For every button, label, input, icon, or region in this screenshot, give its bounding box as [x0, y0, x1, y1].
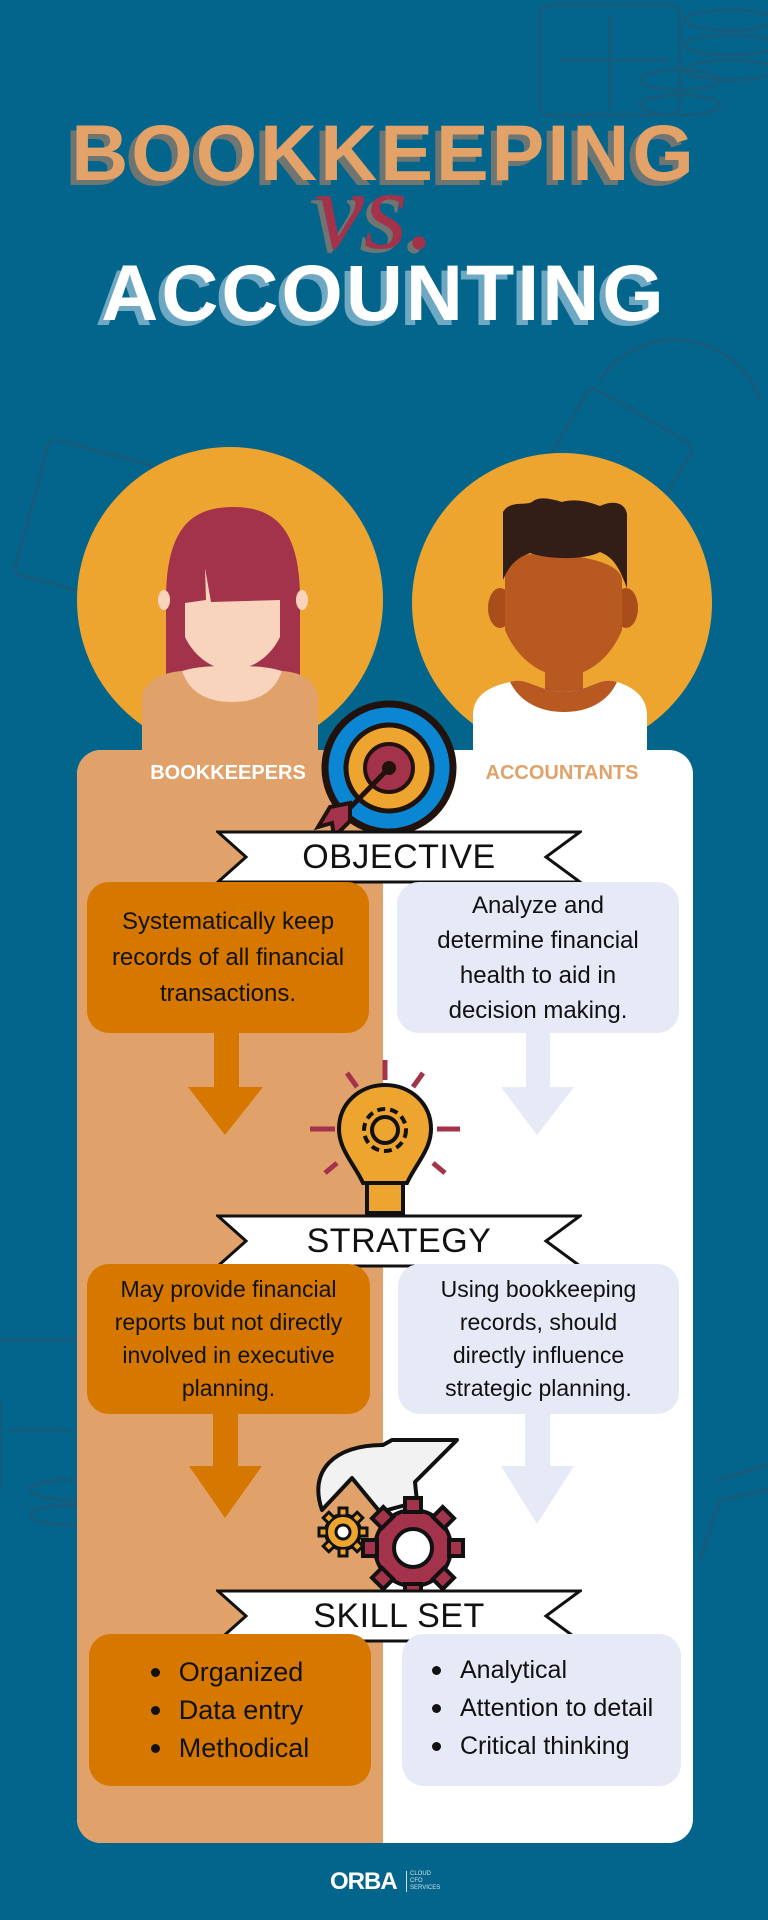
skills: accountants box — [402, 1634, 681, 1786]
title: vs: vs. — [314, 149, 436, 273]
strategy: accountants box — [398, 1264, 679, 1414]
skills: bookkeepers box: Data entry — [179, 1695, 303, 1725]
objective: accountants box: Analyze and — [472, 892, 604, 918]
logo: ORBA — [330, 1868, 440, 1895]
objective: bookkeepers box: Systematically keep — [122, 908, 334, 934]
logo: ORBA: CFO — [410, 1878, 423, 1884]
objective: bookkeepers box: transactions. — [160, 980, 296, 1006]
label: bookkeepers: BOOKKEEPERS — [150, 762, 306, 784]
icon: hammer and gears — [316, 1438, 465, 1590]
objective: bookkeepers box — [87, 882, 369, 1033]
strategy: accountants box: strategic planning. — [445, 1375, 632, 1401]
skills: accountants box: Attention to detail — [460, 1694, 653, 1722]
skills: accountants box: Critical thinking — [460, 1732, 630, 1760]
objective: accountants box: determine financial — [437, 926, 639, 954]
banner: skill set: SKILL SET — [313, 1597, 485, 1635]
arrow: right 1 — [501, 1033, 574, 1135]
arrow: left 1 — [188, 1033, 263, 1135]
title: bookkeeping: BOOKKEEPING — [71, 108, 697, 197]
objective: accountants box: health to aid in — [460, 962, 616, 988]
skills: bookkeepers box: Organized — [179, 1657, 303, 1687]
objective: bookkeepers box: records of all financial — [112, 944, 344, 970]
logo: ORBA: SERVICES — [410, 1885, 440, 1891]
skills: accountants box: Analytical — [460, 1656, 567, 1684]
icon: target — [314, 700, 456, 830]
title: accounting: ACCOUNTING — [101, 248, 667, 337]
logo: ORBA: CLOUD — [410, 1871, 431, 1877]
banner: strategy: STRATEGY — [307, 1222, 491, 1260]
skills: bookkeepers box — [89, 1634, 371, 1786]
banner: objective: OBJECTIVE — [302, 838, 496, 876]
skills: bookkeepers box: Methodical — [179, 1733, 309, 1763]
strategy: bookkeepers box: involved in executive — [122, 1342, 335, 1368]
strategy: bookkeepers box — [87, 1264, 370, 1414]
icon: lightbulb — [310, 1060, 460, 1214]
strategy: bookkeepers box: May provide financial — [120, 1276, 337, 1302]
label: accountants: ACCOUNTANTS — [486, 762, 638, 784]
people illustrations — [77, 447, 712, 750]
arrow: left 2 — [189, 1414, 262, 1518]
banner: objective — [216, 830, 582, 884]
logo: ORBA: ORBA — [330, 1868, 397, 1895]
arrow: right 2 — [501, 1414, 574, 1524]
objective: accountants box — [397, 882, 679, 1033]
banner: strategy — [216, 1214, 582, 1268]
accountant — [412, 453, 712, 760]
strategy: accountants box: records, should — [460, 1309, 617, 1335]
bookkeeper — [77, 447, 383, 760]
strategy: bookkeepers box: reports but not directly — [115, 1309, 342, 1335]
comparison panel — [77, 750, 693, 1843]
banner: skill set — [216, 1590, 582, 1642]
objective: accountants box: decision making. — [449, 996, 627, 1024]
strategy: accountants box: directly influence — [453, 1342, 624, 1368]
strategy: bookkeepers box: planning. — [182, 1375, 275, 1401]
strategy: accountants box: Using bookkeeping — [441, 1276, 636, 1302]
